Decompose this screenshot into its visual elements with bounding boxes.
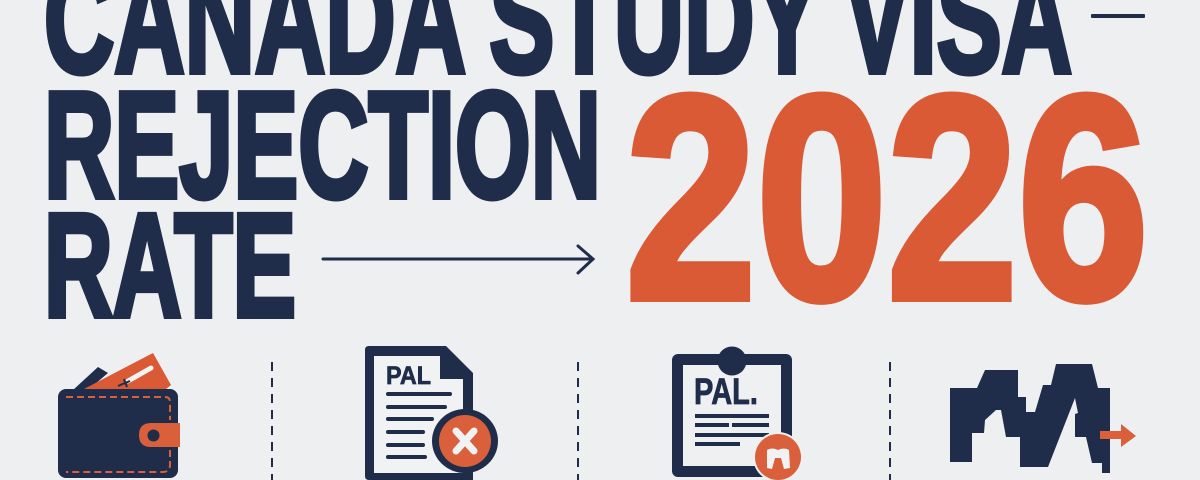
icon: PAL document rejected: PAL: [386, 362, 431, 390]
title: REJECTION: [44, 60, 601, 229]
divider: [577, 362, 579, 480]
divider: [889, 362, 891, 480]
top-right dash: [1091, 14, 1145, 18]
icon: wallet: [58, 353, 180, 478]
icon: PAL document rejected: [365, 346, 498, 480]
icon: skyline with arrow: [950, 364, 1136, 473]
icon: PAL clipboard: [672, 346, 803, 480]
divider: [271, 362, 273, 480]
icon: PAL clipboard: PAL.: [694, 371, 758, 412]
title: RATE: [44, 184, 296, 348]
title: [44, 0, 1072, 348]
arrow: [323, 246, 593, 273]
